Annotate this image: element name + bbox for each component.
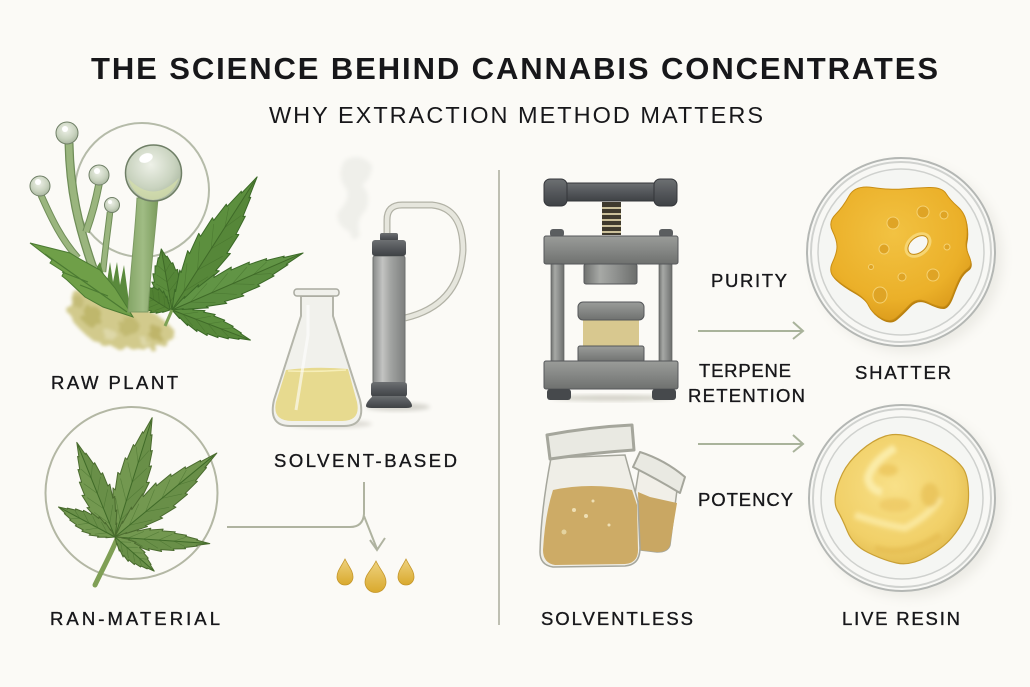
arrow: purity [698, 322, 803, 339]
lower platen top [583, 319, 639, 347]
screw [602, 202, 621, 235]
shadows [288, 420, 372, 428]
shadow [552, 395, 672, 401]
illustration: shatter dish [807, 158, 1002, 352]
upper platen [584, 264, 637, 284]
right leaflets [156, 167, 273, 320]
big left blade [30, 243, 133, 317]
label: shatter: SHATTER [855, 362, 951, 383]
dish shadow [814, 164, 1002, 352]
arrow: retention [698, 435, 803, 452]
label: solvent-based: SOLVENT-BASED [274, 450, 457, 471]
background leaflets [146, 246, 187, 313]
arrow: solvent to extract [227, 482, 385, 550]
illustration: rosin press [544, 179, 678, 401]
big stem [128, 198, 158, 312]
magnifier circle [75, 123, 209, 257]
shatter underside [832, 189, 972, 322]
vertical divider [498, 170, 500, 625]
dish shadow [816, 411, 1002, 597]
dish [809, 405, 995, 591]
illustration: solvent flask and column [273, 157, 463, 428]
label: terpene retention [688, 360, 805, 406]
bolts [550, 229, 564, 237]
top plate [544, 236, 678, 264]
label: raw plant: RAW PLANT [51, 372, 178, 393]
illustration: raw-material leaf [46, 407, 227, 585]
illustration: solventless jars [540, 425, 685, 567]
label: potency: POTENCY [698, 489, 793, 510]
icon: oil drops [337, 559, 414, 592]
label: terpene retention: TERPENE [699, 360, 791, 381]
illustration: raw plant [30, 122, 309, 351]
spheres [126, 145, 182, 201]
columns [551, 263, 564, 363]
stem [95, 534, 119, 585]
label: raw material: RAN-MATERIAL [50, 608, 220, 629]
tube [387, 205, 463, 318]
dish [807, 158, 995, 346]
steam [338, 157, 372, 239]
flask [273, 296, 361, 426]
illustration: live resin dish [809, 405, 1002, 597]
shatter slab [831, 187, 971, 320]
small jar [634, 463, 677, 552]
column [373, 256, 405, 383]
small stems [69, 143, 93, 268]
moss base [67, 290, 175, 349]
resin swirls [855, 448, 940, 551]
handle [565, 183, 655, 201]
label: purity: PURITY [711, 270, 787, 291]
label: terpene retention: RETENTION [688, 385, 805, 406]
bubbles [868, 206, 950, 303]
label: live resin: LIVE RESIN [842, 608, 960, 629]
tuft of grass [85, 262, 130, 310]
base plate [544, 361, 678, 389]
leaflets [99, 413, 168, 542]
circle [46, 407, 218, 579]
label: solventless: SOLVENTLESS [541, 608, 693, 629]
resin blob [835, 434, 969, 564]
title: THE SCIENCE BEHIND CANNABIS CONCENTRATES [91, 51, 938, 86]
feet [547, 389, 571, 400]
big jar [540, 455, 640, 567]
hole [899, 227, 937, 263]
subtitle: WHY EXTRACTION METHOD MATTERS [269, 102, 763, 128]
leaf stem [165, 310, 172, 326]
